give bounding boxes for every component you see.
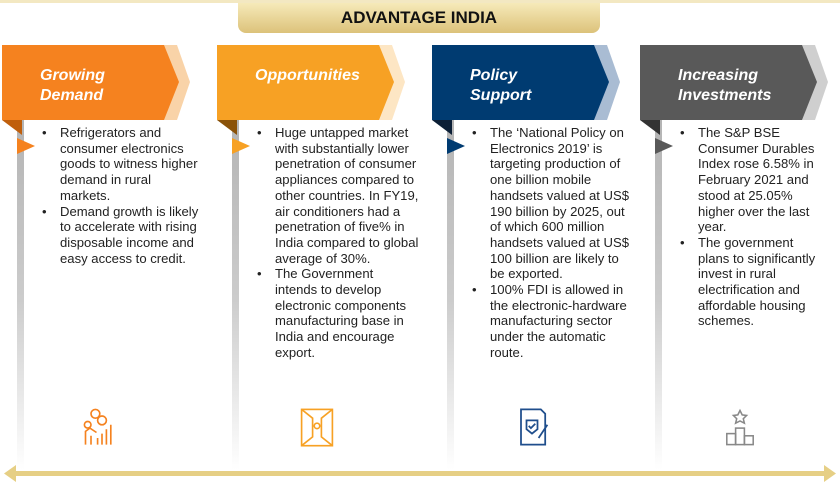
header: growing demand	[2, 45, 190, 120]
panel: policy support: Support	[470, 87, 531, 104]
icon: growth person	[84, 408, 112, 445]
panel: growing demand: Growing	[40, 67, 105, 84]
text: growing demand: Refrigerators and consumer electronics goods to witness higher demand in rural markets.	[60, 125, 198, 203]
panel: policy support: Policy	[470, 67, 517, 84]
panel: opportunities	[217, 45, 418, 447]
panel: increasing investments: Investments	[678, 87, 771, 104]
panel: policy support	[432, 45, 629, 446]
text: opportunities: Huge untapped market with substantially lower penetration of consumer appliances compared to other countries. In FY19, air conditioners had a penetration of five% in India compared to global average of 30%.	[275, 125, 418, 266]
top band	[0, 0, 840, 3]
panel: increasing investments: Increasing	[678, 67, 758, 84]
text: opportunities	[258, 125, 418, 360]
arrow: double-headed timeline	[4, 465, 836, 482]
text: growing demand: Demand growth is likely to accelerate with rising disposable income and easy access to credit.	[60, 204, 198, 266]
panel: growing demand: Demand	[40, 87, 103, 104]
text: policy support: 100% FDI is allowed in the electronic-hardware manufacturing sector under the automatic route.	[490, 282, 627, 360]
text: policy support	[472, 125, 629, 360]
icon: document shield	[520, 408, 548, 446]
header: policy support	[432, 45, 620, 120]
panel: opportunities: Opportunities	[255, 67, 360, 84]
text: opportunities: The Government intends to develop electronic components manufacturing base in India and encourage export.	[275, 266, 406, 360]
title: ADVANTAGE INDIA	[341, 8, 497, 27]
text: increasing investments	[680, 125, 816, 328]
icon: podium star	[726, 409, 754, 446]
panel: increasing investments	[640, 45, 828, 446]
title	[238, 3, 600, 33]
header: opportunities	[217, 45, 405, 120]
text: increasing investments: The government plans to significantly invest in rural electrification and affordable housing schemes.	[698, 235, 815, 328]
header: increasing investments	[640, 45, 828, 120]
icon: door lightbulb	[300, 408, 334, 447]
text: growing demand	[42, 125, 198, 266]
text: increasing investments: The S&P BSE Consumer Durables Index rose 6.58% in February 2021 and stood at 25.05% higher over the last year.	[698, 125, 814, 234]
text: policy support: The ‘National Policy on Electronics 2019’ is targeting production of one billion mobile handsets valued at US$ 190 billion by 2025, out of which 600 million handsets valued at US$ 100 billion are likely to be exported.	[490, 125, 629, 281]
panel: growing demand	[2, 45, 198, 445]
